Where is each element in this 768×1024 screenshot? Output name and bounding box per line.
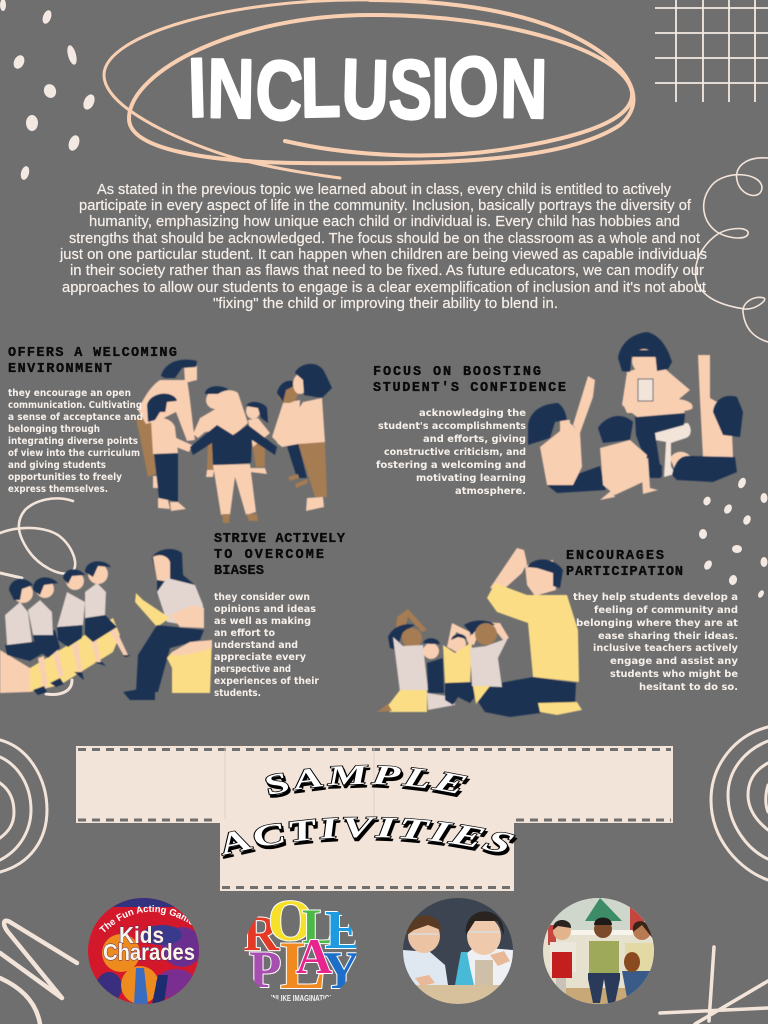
heading: sample activities: SAMPLE bbox=[265, 764, 470, 798]
text: role play tagline: UNLIKE IMAGINATION bbox=[268, 994, 334, 1003]
heading: boosting confidence bbox=[373, 365, 566, 396]
panel: welcoming environment bbox=[8, 346, 332, 523]
decoration: grid top right bbox=[655, 0, 768, 102]
decoration: right curly line bbox=[696, 158, 768, 342]
activity image: kids charades: Charades bbox=[103, 939, 195, 965]
heading: welcoming environment bbox=[8, 346, 177, 377]
activity image: role play: L bbox=[302, 898, 335, 954]
panel: encourages participation bbox=[377, 548, 738, 717]
activity image: role play: E bbox=[325, 899, 362, 960]
intro paragraph bbox=[59, 181, 707, 312]
text: encourages participation: ease sharing their ideas. bbox=[598, 631, 738, 642]
decoration: scribble bottom left bbox=[0, 921, 77, 1024]
activity image: music class bbox=[543, 898, 655, 1004]
activity image: role play: A bbox=[296, 928, 332, 984]
text: boosting confidence: and efforts, giving bbox=[423, 434, 526, 445]
activity image: role play: L bbox=[280, 927, 325, 1003]
text: welcoming environment: and giving students bbox=[8, 460, 106, 471]
decoration: lines bottom right bbox=[660, 947, 768, 1024]
heading: overcome biases: TO OVERCOME bbox=[214, 548, 324, 563]
text: overcome biases: as well as making bbox=[214, 616, 311, 627]
decoration: brush dabs right bbox=[699, 477, 768, 599]
activity image: role play bbox=[244, 900, 356, 1001]
text: welcoming environment: belonging through bbox=[8, 424, 100, 435]
heading: sample activities: ACTIVITIES bbox=[221, 816, 518, 859]
decoration: concentric arcs left bbox=[0, 740, 47, 872]
heading: overcome biases bbox=[214, 532, 346, 579]
text: welcoming environment: opportunities to freely bbox=[8, 472, 122, 483]
text: boosting confidence bbox=[376, 408, 526, 497]
title: INCLUSION bbox=[186, 38, 548, 138]
intro paragraph: humanity, emphasizing how unique each child or individual is. Every child has hobbies and bbox=[89, 213, 680, 230]
text: welcoming environment: a sense of acceptance and bbox=[8, 412, 143, 423]
activity image: role play: R bbox=[243, 905, 280, 961]
intro paragraph: "fixing" the child or improving their ability to blend in. bbox=[213, 295, 558, 312]
text: overcome biases: opinions and ideas bbox=[214, 604, 316, 615]
decoration: scribble circle around title bbox=[104, 0, 634, 178]
intro paragraph: approaches to allow our students to engage is a clear exemplification of inclusion and it's not about bbox=[62, 279, 707, 296]
text: encourages participation: they help students develop a bbox=[573, 592, 738, 603]
intro paragraph: strengths that should be acknowledged. The focus should be on the classroom as a whole and not bbox=[69, 230, 701, 247]
activity image: role play: Y bbox=[322, 942, 360, 1000]
panel: boosting confidence bbox=[373, 332, 743, 500]
illustration: teacher reading to students bbox=[0, 549, 212, 700]
text: welcoming environment: communication. Cultivating bbox=[8, 400, 142, 411]
illustration: teacher and students with cards bbox=[528, 332, 743, 500]
text: overcome biases: understand and bbox=[214, 640, 298, 651]
heading: overcome biases: STRIVE ACTIVELY bbox=[214, 532, 346, 547]
text: encourages participation: belonging where they are at bbox=[576, 618, 738, 629]
text: welcoming environment: they encourage an open bbox=[8, 388, 131, 399]
heading: sample activities bbox=[221, 764, 518, 859]
text: boosting confidence: atmosphere. bbox=[455, 486, 526, 497]
text: encourages participation: students who might be bbox=[610, 669, 738, 680]
activity image: role play: P bbox=[249, 941, 281, 999]
heading: encourages participation bbox=[566, 549, 683, 580]
text: boosting confidence: student's accomplishments bbox=[378, 421, 526, 432]
text: charades game title: The Fun Acting Game! bbox=[99, 905, 192, 932]
activity image: kids charades bbox=[88, 898, 199, 1004]
text: encourages participation bbox=[573, 592, 738, 693]
text: welcoming environment: of view into the curriculum bbox=[8, 448, 140, 459]
text: welcoming environment bbox=[8, 388, 143, 495]
text: boosting confidence: constructive criticism, and bbox=[384, 447, 526, 458]
text: overcome biases: they consider own bbox=[214, 592, 310, 603]
text: encourages participation: inclusive teachers actively bbox=[593, 643, 738, 654]
heading: encourages participation: ENCOURAGES bbox=[566, 549, 664, 564]
text: overcome biases: an effort to bbox=[214, 628, 275, 639]
decoration: left loop lower bbox=[0, 573, 72, 694]
heading: boosting confidence: STUDENT'S CONFIDENCE bbox=[373, 381, 566, 396]
text: boosting confidence: acknowledging the bbox=[419, 408, 526, 419]
banner: sample activities bbox=[76, 746, 673, 891]
text: encourages participation: hesitant to do so. bbox=[639, 682, 738, 693]
intro paragraph: just on one particular student. It can happen when children are being viewed as capable individuals bbox=[59, 246, 707, 263]
text: overcome biases bbox=[214, 592, 319, 699]
intro paragraph: participate in every aspect of life in the community. Inclusion, basically portrays the diversity of bbox=[79, 197, 692, 214]
text: overcome biases: experiences of their bbox=[214, 676, 319, 687]
activity image: kids charades: Kids bbox=[119, 922, 164, 948]
decoration: brush dabs top left bbox=[0, 0, 97, 181]
intro paragraph: in their society rather than as flaws that need to be fixed. As future educators, we can modify our bbox=[70, 262, 704, 279]
illustration: adult and children with arms overhead bbox=[377, 548, 582, 717]
activity image: science kids bbox=[403, 898, 513, 1004]
activity image: role play: O bbox=[268, 888, 313, 953]
heading: welcoming environment: OFFERS A WELCOMING bbox=[8, 346, 177, 361]
decoration: concentric arcs right bbox=[711, 727, 768, 880]
text: encourages participation: engage and assist any bbox=[610, 656, 738, 667]
heading: overcome biases: BIASES bbox=[214, 564, 264, 579]
heading: encourages participation: PARTICIPATION bbox=[566, 565, 683, 580]
text: boosting confidence: fostering a welcoming and bbox=[376, 460, 526, 471]
text: encourages participation: feeling of community and bbox=[594, 605, 738, 616]
panel: overcome biases bbox=[0, 532, 346, 700]
text: welcoming environment: express themselves. bbox=[8, 484, 108, 495]
illustration: group holding hands bbox=[136, 360, 332, 523]
heading: welcoming environment: ENVIRONMENT bbox=[8, 362, 112, 377]
heading: boosting confidence: FOCUS ON BOOSTING bbox=[373, 365, 541, 380]
text: overcome biases: perspective and bbox=[214, 664, 291, 675]
text: overcome biases: students. bbox=[214, 688, 261, 699]
text: boosting confidence: motivating learning bbox=[416, 473, 526, 484]
text: overcome biases: appreciate every bbox=[214, 652, 306, 663]
text: welcoming environment: integrating diverse points bbox=[8, 436, 138, 447]
intro paragraph: As stated in the previous topic we learned about in class, every child is entitled to actively bbox=[97, 181, 671, 198]
decoration: left loop line bbox=[0, 498, 75, 573]
